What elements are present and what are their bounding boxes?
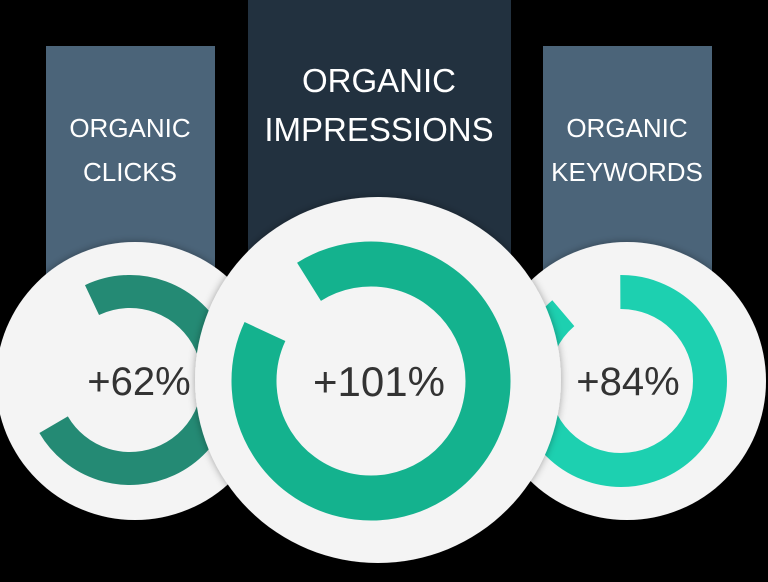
donut: organic impressions +101%: +101%: [313, 358, 445, 405]
donut: organic keywords +84%: [488, 242, 766, 520]
donut: organic clicks +62%: [0, 242, 274, 520]
panel: organic clicks header: CLICKS: [83, 157, 177, 187]
panel: organic impressions header: ORGANIC: [302, 62, 456, 99]
panel: organic impressions header: [248, 0, 511, 260]
panel: organic clicks header: ORGANIC: [69, 113, 191, 143]
panel: organic keywords header: [543, 46, 712, 286]
donut: organic clicks +62%: +62%: [87, 360, 191, 404]
panel: organic keywords header: ORGANIC: [566, 113, 688, 143]
panel: organic clicks header: [46, 46, 215, 286]
donut: organic keywords +84%: +84%: [576, 360, 680, 404]
panel: organic impressions header: IMPRESSIONS: [264, 111, 494, 148]
donut: organic impressions +101%: [195, 197, 561, 563]
panel: organic keywords header: KEYWORDS: [551, 157, 703, 187]
